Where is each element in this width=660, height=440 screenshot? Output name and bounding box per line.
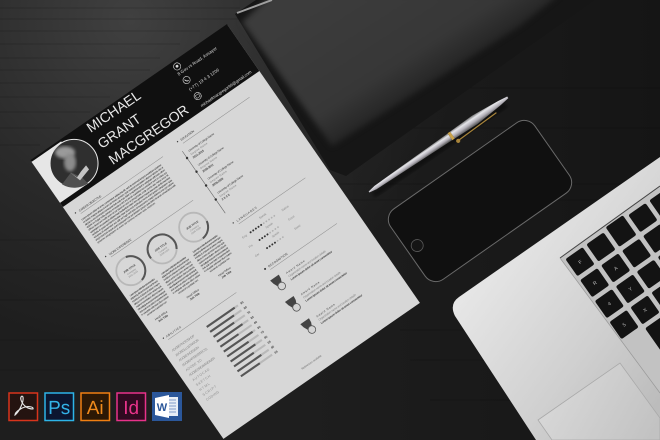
job description 2: occaecat cupidatat non: [178, 278, 200, 295]
job description 2: adipiscing elit sed do eiusmod tempor: [161, 258, 190, 279]
phone body: [383, 115, 577, 287]
pen lower barrel: [367, 133, 452, 195]
paragraph: career objective: officia deserunt mollit anim id est laborum sed ut perspiciatis unde omnis iste natus error sit: [88, 174, 170, 232]
icon: medal 1: [270, 275, 287, 293]
entry 2: [197, 146, 230, 173]
job description 3: occaecat cupidatat non: [209, 257, 231, 273]
icon: medal 2: [285, 296, 302, 314]
name: MACGREGOR: [106, 101, 191, 168]
job description 1: incididunt ut labore et dolore magna: [132, 282, 161, 303]
header band: [30, 24, 259, 207]
key legends: R: [592, 280, 599, 287]
skill labels: ADOBE XD: [185, 358, 203, 372]
chart: job ring 1: [116, 256, 145, 285]
heading: recognition: RECOGNITION: [267, 252, 288, 268]
rating row 3: [250, 218, 302, 258]
job description 2: in voluptate velit esse cillum dolore: [172, 273, 201, 295]
job captions: Head Office: [217, 266, 232, 277]
icon: illustrator: Ai: [87, 398, 104, 419]
job description 3: Lorem ipsum dolor sit amet consectetur: [192, 234, 219, 254]
name: [83, 69, 191, 168]
icon: photoshop: Ps: [48, 398, 70, 419]
chart: job ring 3: Company: [189, 224, 200, 233]
entry 1: University of College Name: [187, 132, 215, 153]
entry 2: 2008-2011: [201, 162, 215, 173]
chart: job ring 1: 2011-2015: [128, 270, 139, 279]
skill labels: ADOBE ILLUSTRATOR: [174, 338, 200, 357]
key legends: Y: [628, 286, 634, 293]
keyboard well: [560, 186, 660, 393]
heading: abilities: [162, 288, 236, 342]
chart: job ring 3: JOB TITLE: [185, 219, 199, 231]
paragraph: career objective: [81, 163, 179, 244]
entry 3: 2005-2008: [211, 176, 224, 187]
job description 1: Lorem ipsum dolor sit amet consectetur: [129, 278, 156, 297]
job description 3: nisi ut aliquip ex ea commodo consequat: [200, 246, 229, 268]
award text 1: Organization name and location details: [287, 249, 327, 278]
heading: work experience: WORK EXPERIENCE: [108, 238, 133, 256]
paragraph: career objective: aliquip ex ea commodo consequat duis aute irure dolor in reprehenderit in voluptate velit esse cillum: [84, 169, 166, 226]
entry 1: Degree Name: [190, 141, 209, 156]
icon: medal 3: [300, 318, 317, 336]
education entries: [187, 132, 249, 201]
entry 3: University of College Name: [207, 160, 235, 181]
icon: illustrator: [81, 393, 110, 420]
heading: education: [176, 92, 250, 146]
paragraph: career objective: veritatis et quasi architecto beatae vitae dicta sunt explicabo nemo enim ipsam voluptatem quia: [91, 179, 173, 237]
pen clip: [456, 113, 498, 143]
rating row 1: Speak: [258, 212, 268, 220]
award text 2: Lorem ipsum dolor sit amet consectetur: [304, 270, 349, 303]
laptop: [453, 157, 660, 440]
skill percentages: 65: [274, 349, 279, 355]
job captions: [154, 266, 234, 324]
job description 2: nostrud exercitation ullamco laboris: [167, 265, 196, 287]
job description 2: incididunt ut labore et dolore magna: [163, 260, 192, 282]
skill labels: AUTOCAD: [192, 367, 211, 382]
icon: photoshop: [45, 393, 74, 420]
entry 3: [207, 160, 239, 187]
skill percentages: 80: [263, 335, 269, 340]
skill percentages: 90: [256, 325, 262, 330]
entry 4: [216, 174, 249, 201]
job descriptions: [128, 233, 235, 319]
rating row 3: Ger: [254, 252, 260, 258]
rating row 2: Speak: [265, 221, 274, 229]
heading: abilities: ABILITIES: [165, 325, 182, 338]
bar chart: skills: [207, 305, 272, 376]
paragraph: career objective: voluptatem accusantium doloremque laudantium totam rem aperiam eaque ipsa quae ab illo inventore: [90, 176, 172, 234]
rating row 3: Basic: [293, 223, 302, 231]
entry 2: Degree Name: [199, 155, 218, 170]
key legends: 4: [607, 301, 613, 308]
job captions: Head Office: [186, 287, 200, 299]
icon: indesign: [117, 393, 146, 420]
chart: job ring 2: [148, 235, 177, 264]
job description 2: duis aute irure dolor in reprehenderit: [170, 271, 199, 292]
entry 4: 2005: [221, 193, 231, 201]
icon: word: W: [157, 402, 168, 414]
portrait photo: [50, 139, 98, 188]
skill labels: SCRIPT: [202, 385, 217, 397]
job captions: Job Title: [157, 313, 169, 323]
job description 1: [128, 276, 172, 319]
chart: job ring 1: Company: [127, 267, 137, 276]
education timeline: [181, 150, 226, 214]
skill percentages: 60: [253, 320, 258, 325]
job description 2: Lorem ipsum dolor sit amet consectetur: [161, 256, 187, 276]
job description 3: incididunt ut labore et dolore magna: [195, 238, 224, 260]
entry 2: University of College Name: [197, 146, 225, 167]
paragraph: career objective: voluptas sit aspernatur aut odit aut fugit sed quia consequuntur magni dolores eos qui ratione: [93, 181, 175, 239]
job captions: Head Office: [154, 309, 169, 321]
entry 4: Degree Name: [219, 183, 238, 198]
pen shadow: [372, 102, 507, 197]
job captions: Job Title: [220, 269, 233, 279]
skill labels: SKETCH: [195, 374, 212, 387]
skill percentages: [239, 300, 279, 355]
award text 3: Award Name: [315, 302, 336, 318]
icon: email: [193, 91, 203, 101]
job description 3: aliqua ut enim ad minim veniam quis: [196, 241, 226, 263]
job description 1: in voluptate velit esse cillum dolore: [141, 295, 170, 317]
job description 3: in voluptate velit esse cillum dolore: [204, 252, 233, 273]
pen upper barrel: [450, 93, 511, 139]
skill percentages: 85: [250, 315, 255, 320]
entry 4: University of College Name: [216, 174, 244, 195]
paragraph: career objective: dolore eu fugiat nulla pariatur excepteur sint occaecat cupidatat non proident sunt in culpa qui: [86, 171, 168, 229]
skill labels: ADOBE AFTER EFFECTS: [181, 347, 209, 367]
chart: job ring 2: JOB TITLE: [154, 241, 168, 253]
chart: job ring 1: JOB TITLE: [122, 263, 137, 274]
award text 1: Lorem ipsum dolor sit amet consectetur: [290, 249, 334, 281]
paragraph: career objective: quaerat voluptatem ut enim ad minima veniam quis nostrum: [97, 202, 156, 244]
job description 3: duis aute irure dolor in reprehenderit: [202, 249, 231, 270]
job description 3: [191, 233, 235, 276]
rating row 1: Native: [281, 204, 290, 212]
job description 2: [159, 255, 203, 298]
footer note: References available: [300, 353, 323, 371]
heading: education: EDUCATION: [180, 129, 195, 142]
pen band: [448, 132, 455, 140]
software icons row: [9, 392, 182, 421]
chart: job ring 2: 2008-2011: [159, 248, 171, 257]
heading: career objective: [74, 152, 163, 216]
award text 2: Award Name: [300, 280, 321, 296]
skill percentages: 80: [243, 305, 248, 310]
paragraph: career objective: sequi nesciunt neque porro quisquam est qui dolorem ipsum quia dolor sit amet consectetur velit: [95, 184, 177, 242]
key legends: A: [613, 265, 620, 272]
key legends: X: [642, 307, 649, 314]
page sheet: [31, 25, 420, 439]
key legends: F: [578, 259, 584, 266]
chart: job ring 3: 2005-2008: [191, 226, 202, 235]
heading: recognition: [263, 219, 337, 272]
key legends: 5: [622, 322, 628, 329]
job description 2: nisi ut aliquip ex ea commodo consequat: [168, 268, 198, 290]
job captions: Job Title: [189, 291, 201, 301]
skill labels: ADOBE INDESIGN: [178, 345, 200, 362]
icon: indesign: Id: [123, 398, 139, 419]
icon: word: [152, 392, 182, 421]
skill percentages: 80: [270, 344, 275, 350]
heading: work experience: [104, 196, 193, 260]
rating row 1: Eng: [241, 233, 248, 240]
laptop base: [453, 157, 660, 440]
skill percentages: 70: [260, 330, 265, 335]
award text 1: Award Name: [285, 259, 306, 275]
phone number: (+77) 19 4 3 1206: [188, 67, 221, 92]
rating row 3: Speak: [271, 230, 280, 238]
language ratings: [238, 199, 303, 258]
phone home button: [409, 237, 426, 254]
heading: languages: [232, 173, 305, 227]
email: michaelmacgregor99@gmail.com: [199, 69, 253, 108]
job description 3: adipiscing elit sed do eiusmod tempor: [193, 236, 222, 257]
award text 3: Organization name and location details: [318, 292, 357, 322]
rating row 2: Fre: [248, 243, 254, 249]
rating row 2: [244, 209, 296, 249]
icon: location: [172, 61, 182, 71]
key legends: [577, 244, 649, 329]
job description 2: aliqua ut enim ad minim veniam quis: [165, 263, 194, 284]
address: 8 Gov rs Road, Assayer: [176, 45, 218, 77]
pen: [366, 93, 513, 200]
smartphone: [383, 115, 577, 287]
name: MICHAEL: [83, 87, 144, 136]
name: GRANT: [94, 110, 144, 152]
resume page: [27, 19, 420, 439]
heading: career objective: CAREER OBJECTIVE: [78, 194, 102, 213]
skill labels: ADOBE PHOTOSHOP: [171, 333, 196, 353]
entry 1: [187, 132, 220, 159]
chart: job ring 2: Company: [158, 246, 169, 254]
notebook shadow body: [235, 0, 600, 176]
entry 1: 2011-2015: [192, 148, 205, 159]
rating row 1: [238, 199, 290, 240]
notebook corner highlight: [237, 0, 272, 13]
contact details: [172, 30, 253, 109]
entry 3: Degree Name: [209, 169, 228, 184]
job description 3: nostrud exercitation ullamco laboris: [198, 244, 228, 265]
icon: acrobat pdf: [9, 393, 38, 420]
heading: languages: LANGUAGES: [236, 206, 258, 223]
job description 1: aliqua ut enim ad minim veniam quis: [134, 284, 163, 306]
job description 1: adipiscing elit sed do eiusmod tempor: [130, 279, 159, 301]
keyboard keys: [564, 186, 660, 376]
skill labels: ADOBE DREAMWEAVER: [188, 356, 216, 377]
award text 3: Lorem ipsum dolor sit amet consectetur: [320, 293, 364, 325]
paragraph: career objective: Lorem ipsum dolor sit amet, consectetur adipiscing elit, sed do eiusmod tempor incididunt ut labore: [81, 163, 163, 221]
job description 1: nostrud exercitation ullamco laboris: [135, 287, 165, 309]
skill percentages: 90: [239, 300, 245, 305]
skill percentages: 70: [246, 310, 251, 315]
job description 1: nisi ut aliquip ex ea commodo consequat: [137, 290, 166, 311]
chart: job ring 3: [179, 213, 208, 242]
icon: phone: [182, 75, 192, 85]
job description 1: duis aute irure dolor in reprehenderit: [139, 293, 168, 314]
trackpad: [538, 363, 660, 440]
paragraph: career objective: et dolore magna aliqua ut enim ad minim veniam, quis nostrud exercitation ullamco laboris nisi ut: [83, 166, 164, 224]
notebook: [235, 0, 600, 176]
rating row 2: Good: [287, 214, 296, 222]
skill labels: HTML: [198, 382, 211, 392]
notebook cover: [242, 0, 560, 146]
job description 1: occaecat cupidatat non: [146, 300, 168, 317]
skill labels: [171, 331, 233, 402]
award text 2: Organization name and location details: [302, 270, 342, 299]
skill percentages: 65: [267, 339, 272, 345]
skill labels: CODING: [205, 390, 220, 402]
